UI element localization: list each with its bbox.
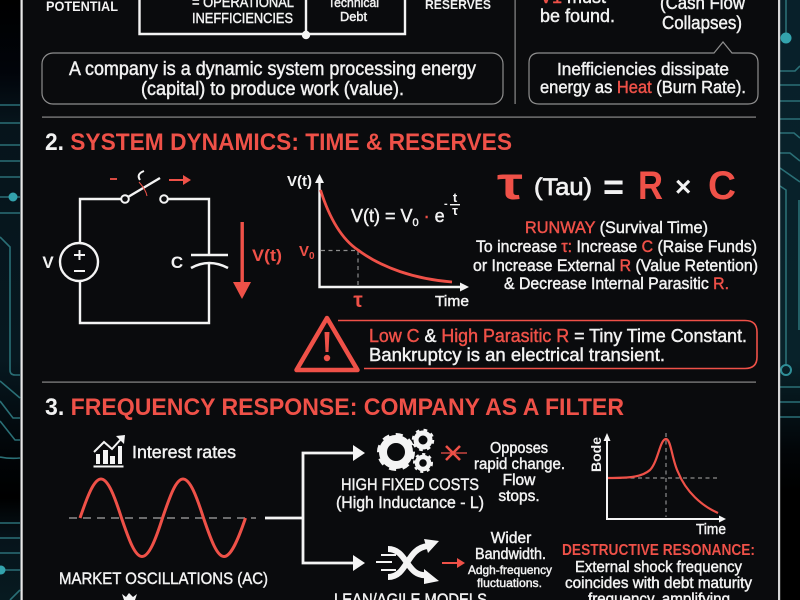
chart: bode resonance bbox=[588, 433, 726, 538]
formula: V(t) = V bbox=[351, 206, 413, 226]
formula: · bbox=[419, 206, 435, 226]
label: technical debt bbox=[328, 0, 379, 24]
voltage source bbox=[42, 243, 98, 281]
label: market oscillations: MARKET OSCILLATIONS (AC) bbox=[59, 569, 268, 588]
text: cash flow collapses: Collapses) bbox=[662, 13, 742, 33]
label: high fixed costs bbox=[336, 475, 484, 512]
text: wider bandwidth: Adgh-frequency bbox=[468, 563, 552, 577]
text: wider bandwidth bbox=[468, 530, 552, 590]
callout: bankruptcy warning bbox=[338, 320, 757, 368]
label: high fixed costs: HIGH FIXED COSTS bbox=[341, 475, 479, 494]
icon: gears bbox=[380, 430, 432, 472]
heading: section 3: 3. FREQUENCY RESPONSE: COMPANY AS A FILTER bbox=[45, 394, 624, 421]
heading: tau formula: = bbox=[603, 166, 624, 207]
formula: - bbox=[444, 198, 448, 210]
text: runway explanation bbox=[473, 219, 758, 293]
heading: tau formula bbox=[497, 157, 736, 209]
callout: company as dynamic system: (capital) to produce work (value). bbox=[141, 79, 404, 100]
heading: section 2: 2. SYSTEM DYNAMICS: TIME & RESERVES bbox=[45, 129, 512, 156]
heading: tau formula: τ bbox=[497, 157, 523, 209]
background: left circuit strip bbox=[0, 0, 21, 600]
text: runway explanation: or Increase External R (Value Retention) bbox=[473, 257, 758, 275]
chart: voltage decay bbox=[287, 173, 469, 312]
formula: t bbox=[453, 190, 458, 205]
icon: interest rates chart bbox=[94, 435, 125, 467]
chart: voltage decay: V bbox=[299, 243, 309, 260]
arrow: red right bbox=[442, 558, 465, 568]
text: runway explanation: & Decrease Internal Parasitic R. bbox=[504, 275, 729, 293]
label: operational inefficiencies bbox=[192, 0, 294, 27]
text: destructive resonance: DESTRUCTIVE RESONANCE: bbox=[562, 542, 755, 559]
formula: 0 bbox=[413, 217, 419, 229]
text: runway explanation: To increase τ: Increase C (Raise Funds) bbox=[476, 238, 757, 256]
text: destructive resonance: External shock frequency bbox=[575, 559, 742, 576]
chart: voltage decay: Time bbox=[435, 293, 469, 310]
heading: tau formula: C bbox=[708, 164, 736, 208]
chart: bode resonance: Time bbox=[696, 522, 726, 538]
heading: tau formula: × bbox=[675, 171, 691, 202]
callout: bankruptcy warning: Bankruptcy is an electrical transient. bbox=[369, 345, 665, 365]
label: technical debt: Debt bbox=[340, 9, 367, 24]
voltage arrow: V(t) bbox=[252, 246, 282, 265]
capacitor bbox=[171, 253, 228, 272]
text: runway explanation: RUNWAY (Survival Time) bbox=[525, 219, 708, 237]
text: wider bandwidth: fluctuations. bbox=[477, 576, 542, 590]
chart: market oscillation wave bbox=[69, 479, 256, 556]
heading: tau formula: (Tau) bbox=[534, 174, 592, 201]
text: opposes rapid change: Opposes bbox=[490, 440, 548, 457]
text: opposes rapid change: stops. bbox=[498, 488, 540, 505]
text: destructive resonance bbox=[562, 542, 755, 600]
label: operational inefficiencies: INEFFICIENCIES bbox=[192, 10, 293, 27]
text: opposes rapid change: Flow bbox=[503, 472, 536, 489]
text: wider bandwidth: Wider bbox=[491, 530, 531, 547]
callout: bankruptcy warning: Low C & High Parasitic R = Tiny Time Constant. bbox=[369, 326, 747, 346]
text: opposes rapid change: rapid change. bbox=[474, 456, 565, 473]
voltage source: V bbox=[42, 253, 54, 272]
callout: company as dynamic system bbox=[42, 53, 503, 104]
circuit diagram: RC circuit bbox=[42, 171, 282, 323]
text: cash flow collapses bbox=[660, 0, 746, 33]
chart: voltage decay: τ bbox=[353, 289, 363, 312]
label: interest rates: Interest rates bbox=[132, 442, 236, 462]
icon: warning triangle bbox=[296, 318, 358, 370]
background: right circuit strip bbox=[780, 0, 800, 600]
icon: shuffle arrows bbox=[376, 539, 439, 584]
callout: heat burn rate: Inefficiencies dissipate bbox=[557, 59, 729, 79]
voltage arrow bbox=[233, 222, 282, 299]
circuit node bbox=[302, 31, 310, 39]
text: wider bandwidth: Bandwidth. bbox=[475, 546, 546, 563]
formula: τ bbox=[452, 203, 458, 218]
formula: e bbox=[435, 206, 445, 226]
text: destructive resonance: coincides with debt maturity bbox=[565, 575, 752, 592]
label: high fixed costs: (High Inductance - L) bbox=[336, 493, 484, 512]
vertical divider, section 1 bbox=[514, 0, 516, 104]
section 1: cropped energy diagram bbox=[46, 0, 491, 39]
capacitor: C bbox=[171, 253, 183, 272]
formula bbox=[351, 190, 460, 229]
circuit box outline bbox=[140, 0, 405, 34]
text: v must be found: be found. bbox=[540, 6, 615, 26]
arrows: filter branches bbox=[265, 445, 365, 571]
chart: voltage decay: 0 bbox=[309, 251, 315, 262]
heading: tau formula: R bbox=[638, 164, 663, 208]
callout: company as dynamic system: A company is a dynamic system processing energy bbox=[69, 59, 476, 80]
chart: bode resonance: Bode bbox=[588, 437, 604, 472]
wires bbox=[80, 199, 209, 323]
callout: heat burn rate bbox=[529, 42, 758, 104]
switch bbox=[110, 171, 191, 203]
callout: heat burn rate: energy as Heat (Burn Rate). bbox=[540, 77, 746, 97]
icon: cropped crown bbox=[122, 593, 137, 600]
chart: voltage decay: V(t) bbox=[287, 173, 312, 190]
icon: red blocked mark bbox=[441, 446, 467, 460]
text: opposes rapid change bbox=[474, 440, 565, 505]
